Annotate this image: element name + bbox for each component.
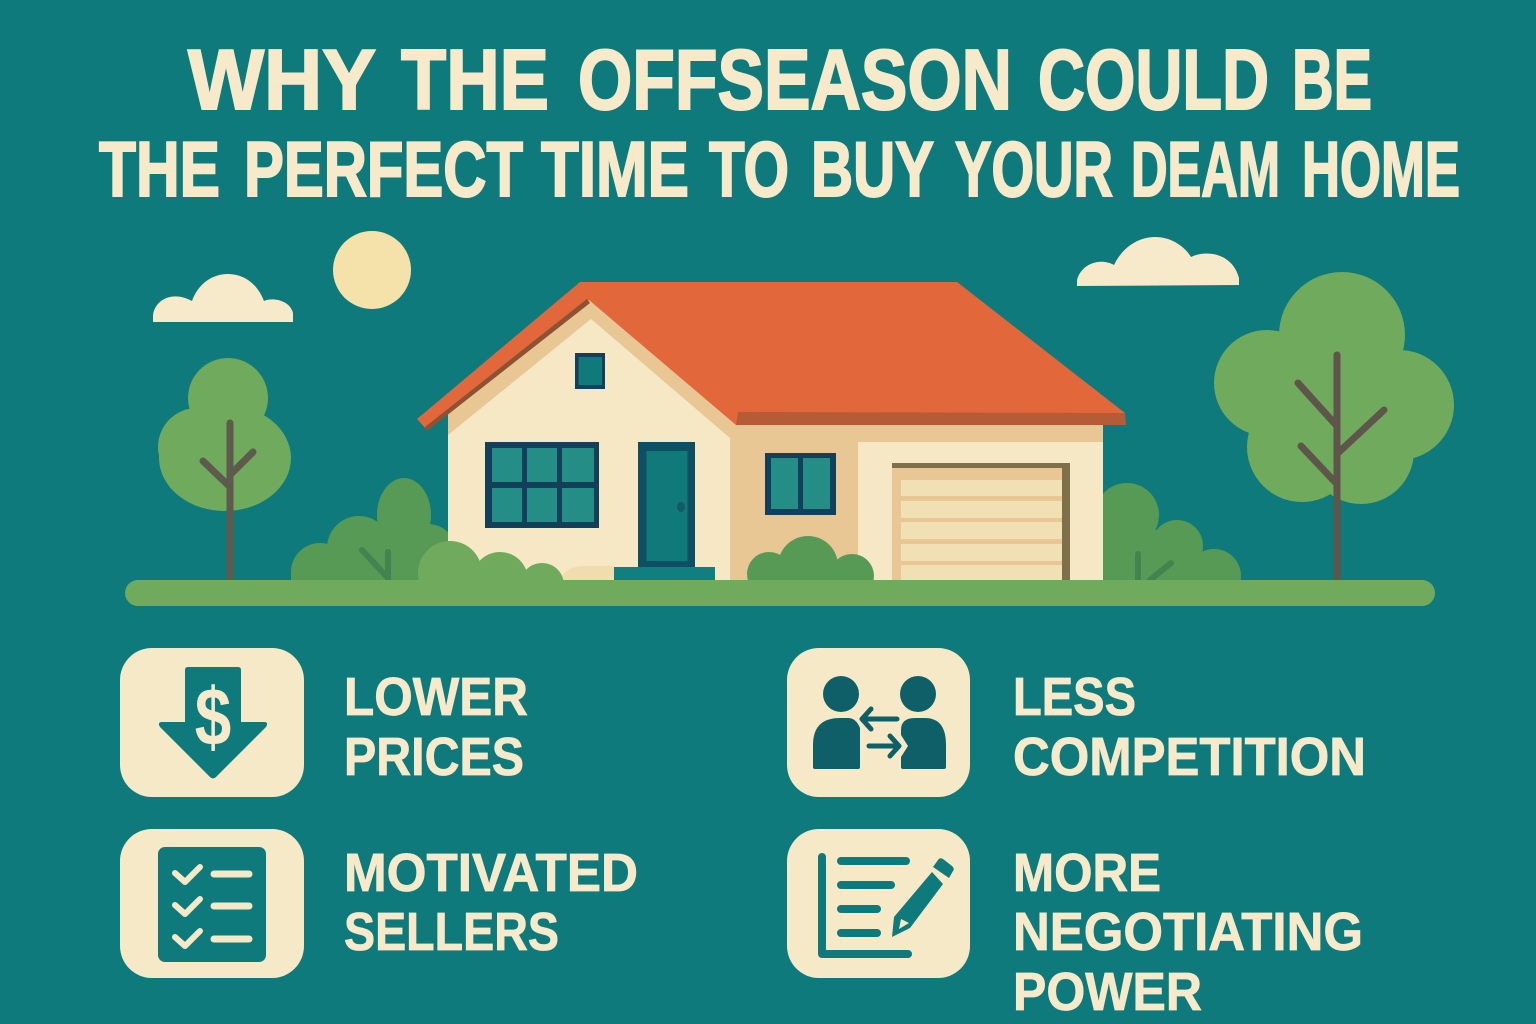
title: PERFECT	[244, 125, 523, 213]
ground	[125, 580, 1435, 606]
panel: lower prices	[120, 648, 528, 797]
label: more negotiating power: NEGOTIATING	[1013, 902, 1363, 962]
title: COULD	[1038, 33, 1269, 128]
front door	[638, 442, 695, 567]
icon: price down arrow: $	[195, 671, 231, 763]
right window	[765, 453, 836, 515]
icon: right cloud	[1077, 237, 1239, 286]
panel: motivated sellers	[120, 829, 638, 978]
illustration: house scene	[125, 231, 1454, 608]
garage door	[892, 463, 1070, 580]
icon: sun	[333, 231, 411, 309]
label: lower prices: LOWER	[344, 667, 528, 727]
label: lower prices: PRICES	[344, 727, 524, 787]
main roof	[417, 282, 1125, 429]
title: THE	[401, 33, 549, 128]
door step	[614, 567, 715, 580]
title: YOUR	[955, 125, 1113, 213]
roof fascia	[736, 412, 1126, 425]
gable trim	[448, 298, 738, 580]
label: motivated sellers: MOTIVATED	[344, 843, 638, 903]
icon: left cloud	[153, 274, 293, 322]
title: HOME	[1302, 125, 1460, 213]
title: BE	[1292, 33, 1372, 128]
label: motivated sellers: SELLERS	[344, 902, 559, 962]
label: more negotiating power: POWER	[1013, 962, 1202, 1022]
back right bush	[1095, 483, 1241, 603]
title: TO	[709, 125, 789, 213]
title	[99, 33, 1460, 213]
label: lower prices	[344, 667, 528, 787]
gable wall	[448, 319, 730, 580]
title: OFFSEASON	[578, 33, 1012, 128]
icon: price down arrow	[120, 648, 304, 797]
roof shadow	[425, 299, 590, 431]
title: WHY	[188, 33, 376, 128]
attic window	[575, 353, 605, 389]
label: less competition: COMPETITION	[1013, 727, 1366, 787]
label: less competition	[1013, 667, 1366, 787]
front left bush	[418, 541, 564, 580]
title: TIME	[541, 125, 689, 213]
back left bush	[291, 478, 456, 601]
right tree	[1214, 272, 1454, 580]
panel: more negotiating power	[787, 829, 1363, 1022]
label: motivated sellers	[344, 843, 638, 962]
icon: two people exchanging	[787, 648, 970, 797]
label: more negotiating power	[1013, 843, 1363, 1022]
title: THE	[99, 125, 220, 213]
house	[417, 282, 1126, 580]
garage wall	[858, 442, 1103, 580]
wing wall	[728, 425, 1103, 580]
main window	[485, 442, 599, 528]
path stone	[560, 566, 614, 580]
title: DEAM	[1131, 125, 1280, 213]
panel: less competition	[787, 648, 1366, 797]
front centre bush	[747, 536, 874, 580]
label: less competition: LESS	[1013, 667, 1136, 727]
icon: checklist	[120, 829, 304, 978]
title: BUY	[811, 125, 934, 213]
left tree	[158, 358, 291, 580]
icon: document and pencil	[787, 829, 970, 978]
label: more negotiating power: MORE	[1013, 843, 1161, 903]
